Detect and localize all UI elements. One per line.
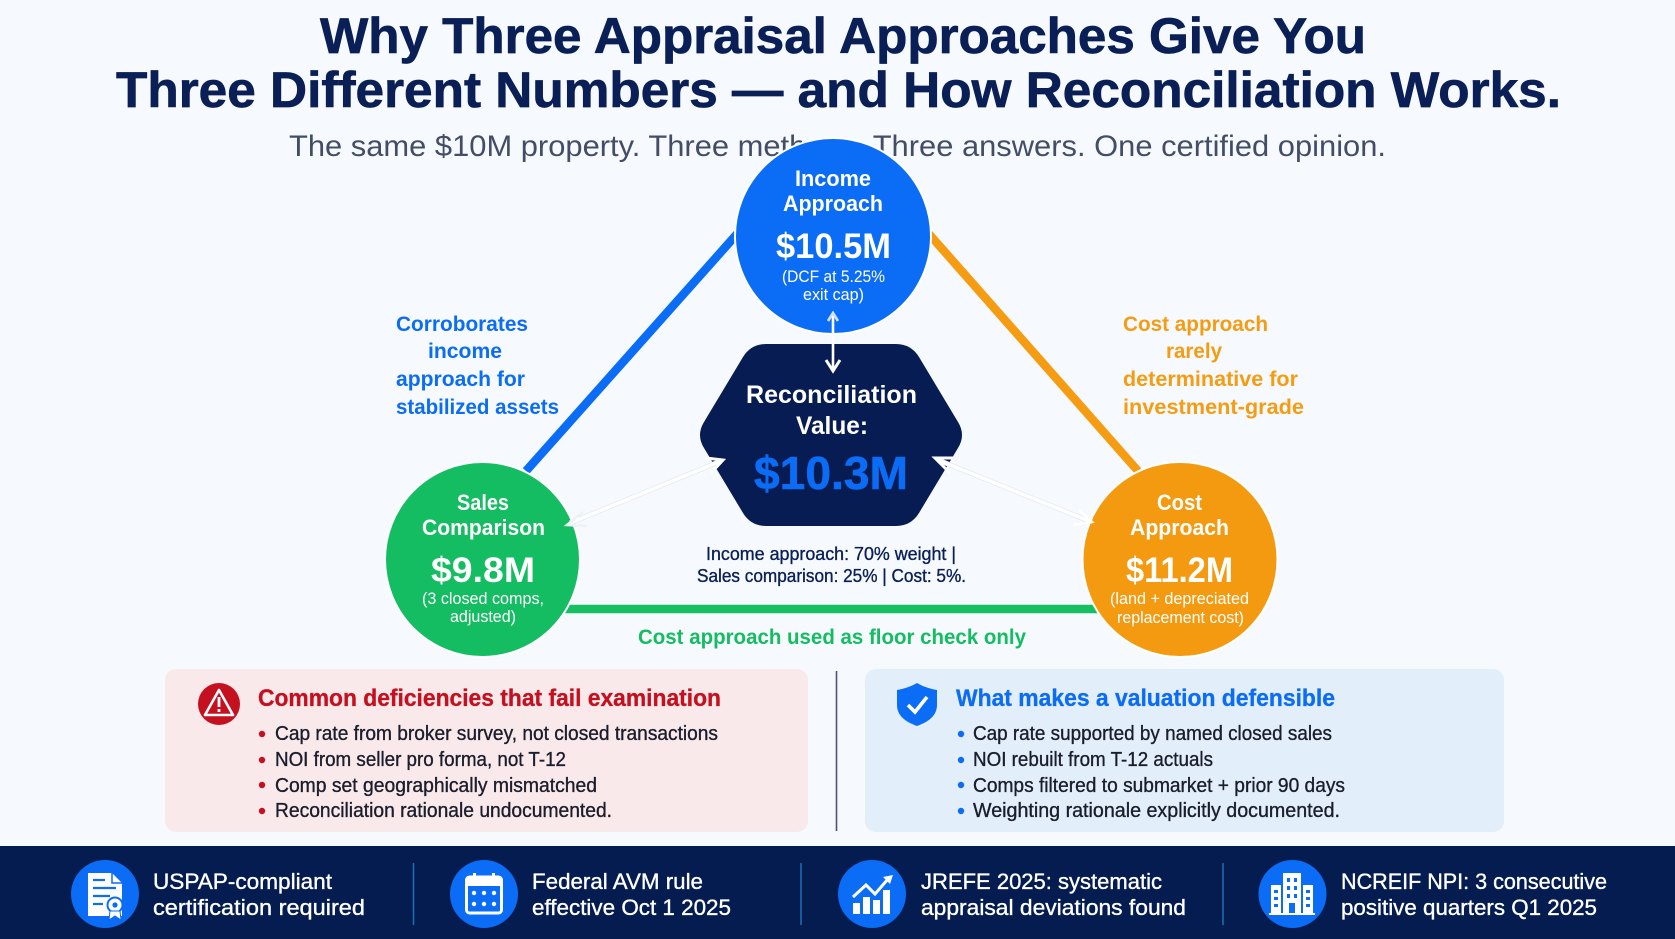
label: cost approach rarely determinative: rarely bbox=[1166, 340, 1222, 363]
panel: common deficiencies bbox=[165, 669, 808, 832]
arrow: sales to reconciliation bbox=[567, 458, 723, 526]
label: corroborates income approach: income bbox=[428, 340, 502, 363]
node: income approach: exit cap) bbox=[803, 285, 864, 304]
node: income approach: $10.5M bbox=[776, 227, 891, 266]
node: reconciliation value hexagon: Value: bbox=[796, 412, 868, 440]
label: corroborates income approach: Corroborates bbox=[396, 313, 528, 336]
node: cost approach bbox=[1082, 462, 1278, 657]
node: sales comparison: (3 closed comps, bbox=[422, 589, 544, 608]
triangle connector: income to cost bbox=[929, 234, 1138, 471]
node: sales comparison: Sales bbox=[457, 490, 509, 515]
panel heading: Common deficiencies that fail examination bbox=[258, 685, 721, 712]
defensible list: NOI rebuilt from T-12 actuals bbox=[973, 749, 1213, 771]
text: NCREIF: NCREIF NPI: 3 consecutive bbox=[1341, 869, 1607, 894]
text: USPAP: certification required bbox=[153, 895, 365, 920]
node: cost approach: (land + depreciated bbox=[1110, 589, 1249, 608]
panel: what makes a valuation defensible bbox=[865, 669, 1504, 832]
icon: calendar bbox=[450, 860, 518, 928]
icon: certificate document bbox=[71, 860, 139, 928]
footer bar bbox=[0, 846, 1675, 939]
defensible list bbox=[958, 723, 1345, 822]
node: reconciliation value hexagon bbox=[700, 344, 962, 526]
deficiency list: Comp set geographically mismatched bbox=[275, 775, 597, 797]
text: JREFE: appraisal deviations found bbox=[921, 895, 1186, 920]
subtitle: The same $10M property. Three methods. Three answers. One certified opinion. bbox=[289, 130, 1386, 163]
defensible list: Weighting rationale explicitly documented. bbox=[973, 800, 1340, 822]
icon: rising chart bbox=[838, 860, 906, 928]
icon: warning triangle bbox=[198, 683, 240, 725]
node: cost approach: Approach bbox=[1130, 515, 1229, 540]
node: cost approach: Cost bbox=[1157, 490, 1203, 515]
weighting note: Income approach: 70% weight | bbox=[706, 544, 956, 564]
node: sales comparison bbox=[385, 462, 580, 657]
label: corroborates income approach bbox=[396, 313, 559, 419]
defensible list: Cap rate supported by named closed sales bbox=[973, 723, 1332, 745]
label: cost approach rarely determinative: investment-grade bbox=[1123, 396, 1304, 419]
deficiency list bbox=[259, 723, 718, 822]
deficiency list: Reconciliation rationale undocumented. bbox=[275, 800, 612, 822]
text: JREFE bbox=[921, 869, 1186, 920]
label: cost approach rarely determinative bbox=[1123, 313, 1304, 419]
icon: office buildings bbox=[1258, 860, 1326, 928]
text: NCREIF: positive quarters Q1 2025 bbox=[1341, 895, 1597, 920]
text: USPAP bbox=[153, 869, 365, 920]
node: reconciliation value hexagon: $10.3M bbox=[754, 447, 908, 499]
title: Three Different Numbers — and How Reconciliation Works. bbox=[116, 62, 1561, 118]
text: JREFE: JREFE 2025: systematic bbox=[921, 869, 1162, 894]
node: income approach: Income bbox=[795, 166, 871, 191]
label: floor check: Cost approach used as floor check only bbox=[638, 625, 1026, 649]
icon: shield check bbox=[897, 683, 937, 726]
node: income approach: Approach bbox=[783, 191, 883, 216]
node: income approach: (DCF at 5.25% bbox=[782, 267, 885, 286]
title bbox=[116, 8, 1561, 118]
label: cost approach rarely determinative: Cost approach bbox=[1123, 313, 1268, 336]
label: cost approach rarely determinative: determinative for bbox=[1123, 368, 1298, 391]
label: corroborates income approach: stabilized assets bbox=[396, 396, 559, 419]
weighting note bbox=[697, 544, 966, 586]
defensible list: Comps filtered to submarket + prior 90 days bbox=[973, 775, 1345, 797]
label: corroborates income approach: approach for bbox=[396, 368, 525, 391]
triangle connector: sales to cost bbox=[565, 605, 1100, 613]
text: AVM rule bbox=[532, 869, 731, 920]
node: cost approach: $11.2M bbox=[1126, 551, 1233, 590]
deficiency list: Cap rate from broker survey, not closed transactions bbox=[275, 723, 718, 745]
deficiency list: NOI from seller pro forma, not T-12 bbox=[275, 749, 566, 771]
node: income approach bbox=[735, 138, 931, 334]
node: sales comparison: $9.8M bbox=[431, 551, 535, 590]
triangle connector: income to sales bbox=[526, 234, 737, 471]
node: reconciliation value hexagon: Reconciliation bbox=[746, 381, 917, 409]
node: cost approach: replacement cost) bbox=[1117, 608, 1244, 627]
node: sales comparison: adjusted) bbox=[450, 607, 516, 626]
weighting note: Sales comparison: 25% | Cost: 5%. bbox=[697, 566, 966, 586]
text: AVM rule: Federal AVM rule bbox=[532, 869, 703, 894]
arrow: income to reconciliation bbox=[826, 313, 840, 371]
panel heading: What makes a valuation defensible bbox=[956, 685, 1335, 712]
arrow: cost to reconciliation bbox=[935, 458, 1092, 525]
node: sales comparison: Comparison bbox=[422, 515, 545, 540]
text: AVM rule: effective Oct 1 2025 bbox=[532, 895, 731, 920]
title: Why Three Appraisal Approaches Give You bbox=[320, 8, 1366, 64]
text: USPAP: USPAP-compliant bbox=[153, 869, 332, 894]
text: NCREIF bbox=[1341, 869, 1607, 920]
